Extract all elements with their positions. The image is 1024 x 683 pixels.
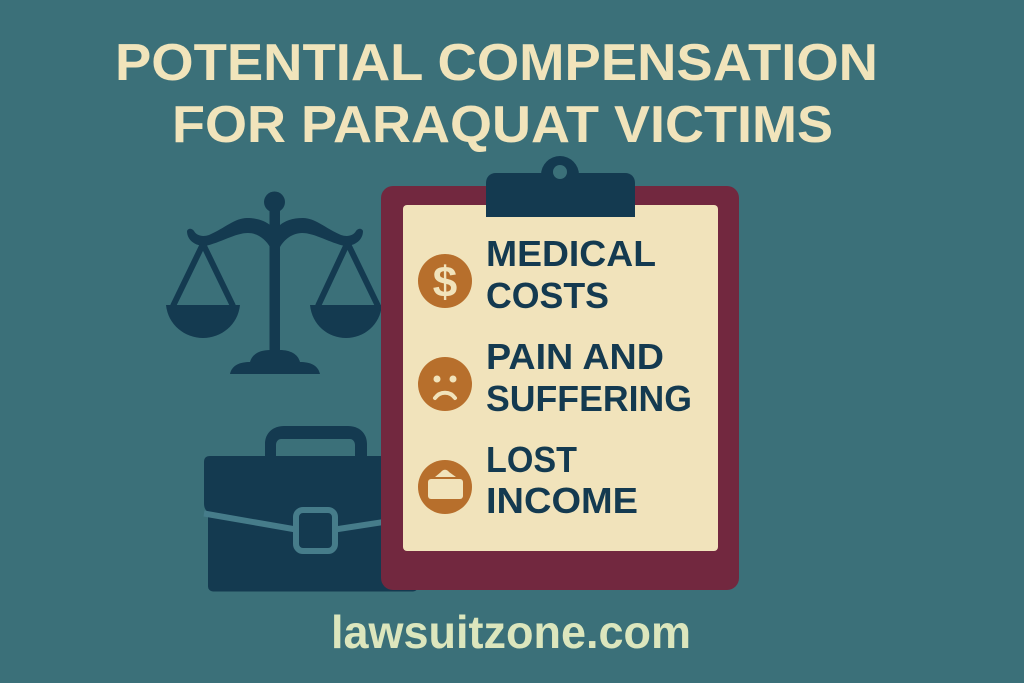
icon: briefcase coin xyxy=(418,460,472,514)
text: pain and suffering: PAIN AND xyxy=(486,336,664,377)
text: lost income: INCOME xyxy=(486,480,638,521)
icon: dollar coin xyxy=(418,254,472,308)
text: lost income: LOST xyxy=(486,439,577,480)
text: lost income xyxy=(486,439,638,521)
title: POTENTIAL COMPENSATION xyxy=(115,34,878,92)
text: medical costs xyxy=(486,233,656,316)
title xyxy=(115,34,878,154)
icon: dollar coin: $ xyxy=(433,258,457,307)
title: FOR PARAQUAT VICTIMS xyxy=(172,96,833,154)
icon: sad face xyxy=(418,357,472,411)
icon: clipboard clip xyxy=(486,156,635,217)
text: medical costs: MEDICAL xyxy=(486,233,656,274)
text: pain and suffering xyxy=(486,336,692,419)
panel: clipboard xyxy=(381,156,739,590)
text: medical costs: COSTS xyxy=(486,275,609,316)
icon: scales of justice xyxy=(166,192,382,374)
text: pain and suffering: SUFFERING xyxy=(486,378,692,419)
icon: briefcase xyxy=(204,426,418,592)
footer website: lawsuitzone.com xyxy=(331,606,691,658)
panel: paper sheet xyxy=(403,205,718,551)
